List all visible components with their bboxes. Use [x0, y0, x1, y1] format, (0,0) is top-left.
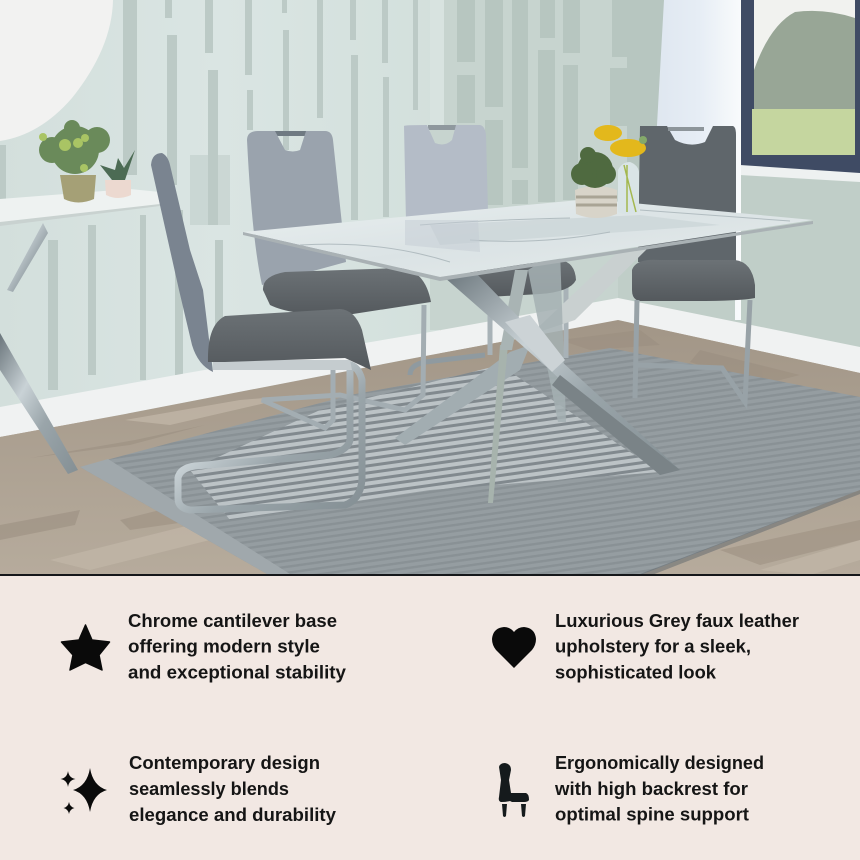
chair 4: dark right chair	[632, 126, 755, 402]
text: faux leather: upholstery for a sleek,	[555, 636, 751, 657]
text: contemporary design: Contemporary design	[129, 752, 320, 773]
text: chrome base: offering modern style	[128, 636, 320, 657]
panel: features	[0, 576, 860, 860]
text: chrome base: Chrome cantilever base	[128, 610, 337, 631]
icon: heart	[492, 627, 536, 668]
text: ergonomic backrest: with high backrest for	[554, 778, 748, 799]
wall: right side below window	[618, 165, 860, 350]
chair 1 backrest	[151, 153, 213, 372]
icon: star	[62, 625, 110, 670]
text: ergonomic backrest: optimal spine support	[555, 804, 749, 824]
text: faux leather: sophisticated look	[555, 662, 717, 682]
icon: sparkles	[60, 768, 107, 814]
mirror	[0, 0, 113, 141]
feature: ergonomic backrest	[499, 752, 764, 824]
text: contemporary design: seamlessly blends	[129, 778, 289, 799]
chair 1: front chair	[151, 153, 371, 510]
text: chrome base: and exceptional stability	[128, 662, 347, 682]
table base: chrome crossed legs	[395, 248, 680, 503]
rug	[80, 348, 860, 575]
feature: faux leather	[492, 610, 799, 682]
wall: right panelling	[430, 0, 665, 330]
divider line	[0, 574, 860, 576]
wall: left geometric panelling	[0, 0, 440, 420]
window	[740, 0, 860, 182]
feature: contemporary design	[60, 752, 337, 825]
icon: chair	[499, 763, 529, 817]
text: faux leather: Luxurious Grey faux leather	[555, 610, 799, 631]
console table	[0, 120, 160, 474]
table top: marble	[243, 199, 813, 281]
feature: chrome base	[62, 610, 347, 682]
chair 2: back left chair	[247, 131, 431, 428]
photo: dining room scene	[0, 0, 860, 575]
chair 1 seat	[208, 309, 371, 370]
floor	[0, 320, 860, 575]
plant in pink pot	[100, 150, 135, 198]
table centrepiece: flowers and plant	[571, 125, 647, 218]
curtain	[657, 0, 741, 320]
text: contemporary design: elegance and durability	[129, 804, 337, 825]
skirting boards	[0, 298, 860, 437]
plant in stone pot	[39, 120, 110, 202]
chair 3: light grey back chair	[404, 125, 576, 375]
text: ergonomic backrest: Ergonomically designed	[555, 752, 764, 773]
